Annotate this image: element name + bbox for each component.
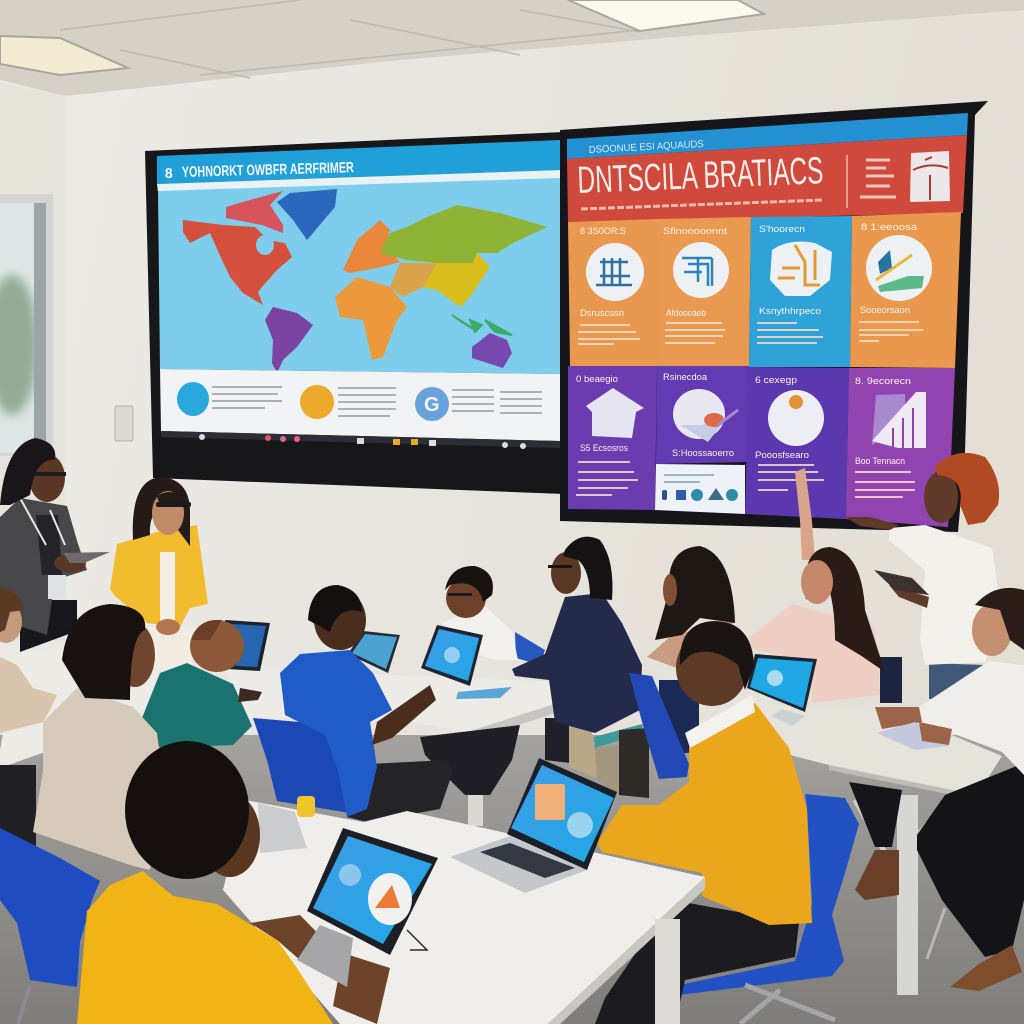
card headings: Sfinooooonnt [663, 226, 728, 236]
card body text lines [576, 322, 923, 497]
wall switch [115, 406, 133, 441]
card headings: Afdoooaeb [666, 308, 706, 318]
card headings: Rsinecdoa [663, 372, 707, 382]
right screen: strategy poster [560, 101, 988, 532]
illustration 2 [673, 242, 729, 298]
map continents [183, 189, 547, 373]
back centre table [223, 668, 589, 733]
card headings: Ksnythhrpeco [759, 306, 821, 316]
person: boy in blue shirt [253, 585, 453, 822]
tablet [63, 552, 110, 563]
person: right seated woman [849, 588, 1024, 991]
person: kid in white shirt [420, 566, 520, 795]
legend icon G: G [424, 394, 440, 416]
illustration 3 [770, 242, 832, 296]
white tablet stand [258, 803, 307, 853]
person: foreground student in yellow [77, 741, 390, 1024]
shoe [950, 945, 1022, 991]
person: woman in beige sweater with dreadlocks [33, 604, 160, 870]
tablet [874, 570, 929, 595]
screen frame [145, 132, 564, 494]
illustration 6 [673, 389, 738, 442]
card 4 [850, 212, 961, 368]
Africa [335, 277, 407, 360]
back right table [645, 665, 1002, 795]
card headings: 8 1:eeoosa [861, 222, 917, 232]
Middle East [390, 263, 437, 297]
tablet: blue boy [348, 631, 400, 673]
card 2 [658, 217, 751, 366]
card headings: 8. 9ecorecn [855, 376, 911, 386]
front left blue chair [0, 828, 100, 1024]
top bar [567, 113, 968, 159]
chart card [655, 464, 745, 514]
North America [183, 220, 292, 305]
paper [456, 687, 512, 699]
back tables [0, 646, 1002, 995]
header title: YOHNORKT OWBFR AERFRIMER [182, 159, 354, 181]
card headings: Pooosfsearo [755, 450, 809, 460]
yellow cube [297, 796, 315, 817]
screen frame and rod [560, 101, 988, 532]
person: woman in yellow cardigan [110, 477, 208, 672]
tablet: bald man [225, 620, 270, 671]
card headings: 6 cexegp [755, 375, 797, 385]
ceiling lights [0, 0, 764, 75]
red curly hair [934, 453, 999, 525]
laptop: pink blouse woman [747, 654, 817, 726]
person: woman in navy blazer [512, 537, 649, 798]
card headings: 0 beaegio [576, 374, 618, 384]
card headings: S:Hoossaoerro [672, 448, 734, 458]
card 1 [568, 219, 658, 366]
far left seated woman [0, 587, 57, 850]
laptop: front centre [450, 758, 617, 893]
taskbar [161, 431, 560, 448]
Australia [472, 333, 512, 368]
illustration 1 [586, 243, 644, 301]
person: man in yellow sweater [595, 621, 859, 1024]
front table [223, 800, 705, 1024]
trousers [595, 900, 799, 1024]
illustration 4 [866, 235, 932, 301]
ceiling [0, 0, 1024, 96]
card headings: Boo Tennacn [855, 456, 905, 466]
map ocean [158, 178, 560, 374]
blue chair [253, 718, 350, 813]
card headings: Dsruscssn [580, 308, 624, 318]
purple cards [568, 366, 955, 527]
Europe [343, 220, 400, 273]
Greenland [277, 189, 337, 240]
laptop: foreground [297, 828, 438, 987]
sweater [597, 703, 812, 925]
Asia [380, 205, 547, 267]
person: bald man in teal hoodie [142, 620, 262, 748]
illustration 5 [586, 388, 644, 438]
window [0, 194, 53, 456]
red banner [567, 135, 967, 222]
legend panel [160, 369, 560, 441]
China and India [423, 253, 490, 307]
banner title: DNTSCILA BRATIACS [577, 150, 824, 202]
legend icon blue [177, 382, 209, 416]
card illustrations [586, 235, 932, 501]
card headings: 8 3S0OR:S [580, 226, 626, 236]
card 3 [749, 216, 852, 367]
notebook [877, 722, 949, 750]
banner image [910, 151, 950, 202]
top bar text: DSOONUE ESI AQUAUDS [589, 139, 704, 156]
Arctic islands [226, 191, 283, 233]
card headings: Sooeorsaon [860, 305, 910, 315]
card headings [576, 222, 917, 466]
legend icon G [415, 387, 449, 421]
person: left presenter in gray blazer [0, 438, 110, 652]
South America [265, 307, 313, 373]
card headings: S5 Ecsosros [580, 443, 628, 453]
orange and blue cards [568, 212, 961, 368]
tablets on back table [225, 620, 512, 699]
carpet floor [0, 735, 1024, 1024]
seat and coat [545, 718, 570, 763]
Indonesia [452, 315, 512, 335]
card headings: S'hoorecn [759, 224, 805, 234]
pink woman legs [849, 782, 902, 847]
chair strip [979, 843, 1024, 860]
blue chair behind man [629, 673, 699, 779]
back left table [0, 646, 170, 768]
illustration 8 [872, 392, 926, 448]
Hudson Bay [256, 235, 274, 255]
back chairs [515, 632, 545, 665]
person: woman in pink blouse raising hand [749, 468, 902, 703]
person: standing woman with red hair [845, 453, 999, 699]
raised arm [795, 468, 815, 560]
left wall [0, 82, 65, 640]
legend icon yellow [300, 385, 334, 419]
header logo: 8 [165, 165, 173, 181]
person: woman with curly hair [647, 546, 735, 672]
mini chart [662, 475, 738, 501]
blue chair [679, 794, 859, 995]
illustration 7 [768, 390, 824, 446]
left screen: world map [145, 132, 564, 494]
tablet: kid [421, 625, 483, 686]
header bar [157, 140, 560, 184]
